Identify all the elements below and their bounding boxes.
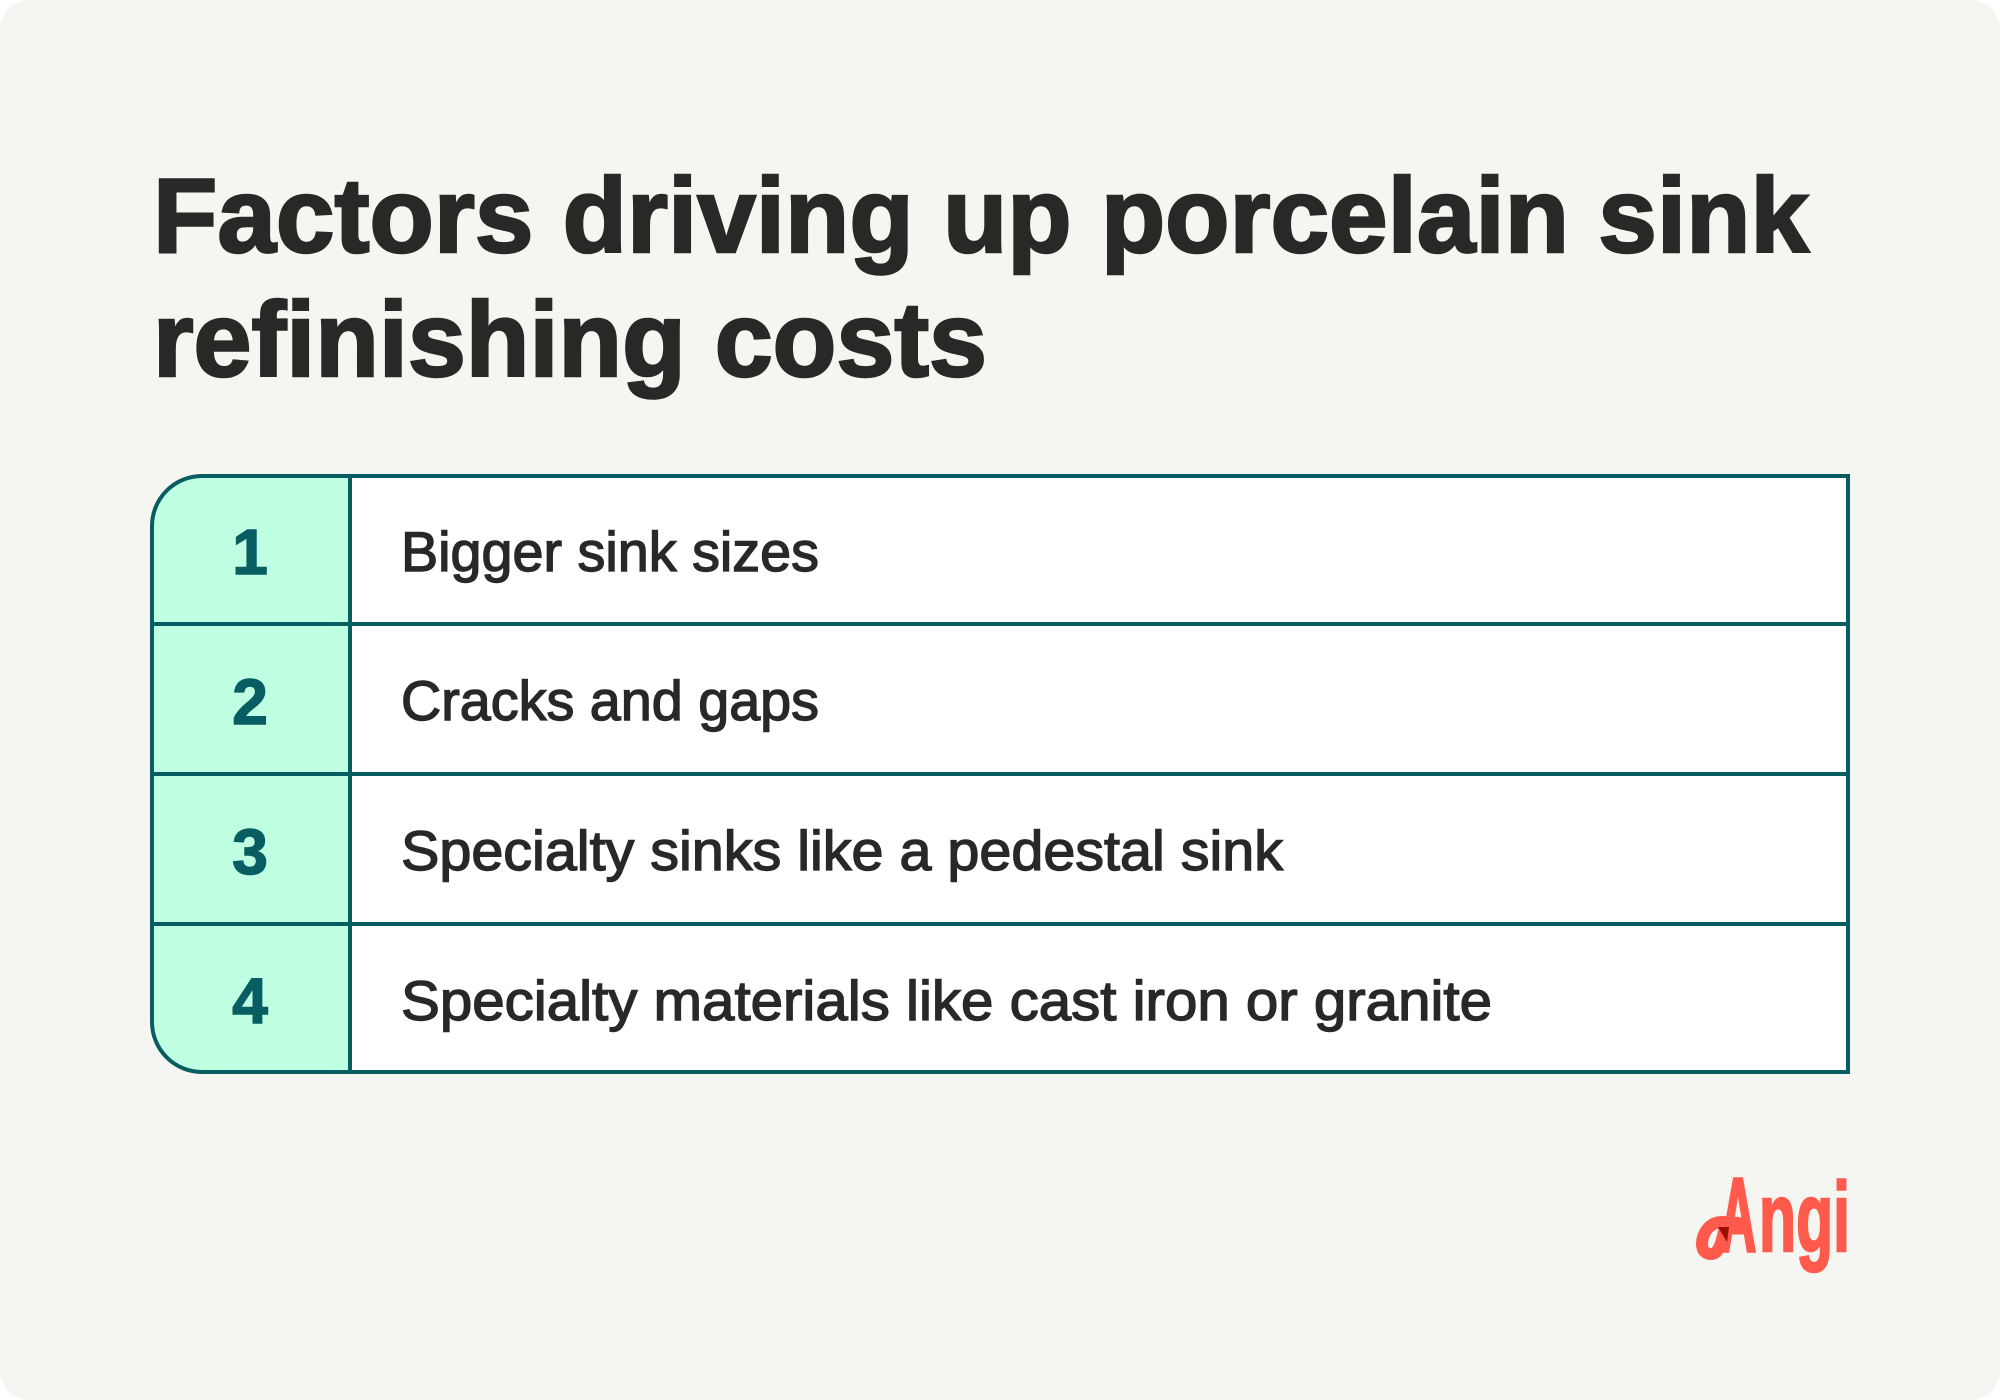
row 2: Cracks and gaps: [401, 669, 819, 732]
row 1: 1: [232, 516, 268, 588]
title: refinishing costs: [153, 281, 987, 399]
row 1: [232, 516, 819, 588]
title: [153, 157, 1810, 399]
title: Factors driving up porcelain sink: [153, 157, 1810, 275]
text column fill: [350, 476, 1848, 1072]
row 2: [232, 666, 819, 738]
logo: Angi: A: [1720, 1158, 1756, 1274]
logo: Angi: [1702, 1158, 1850, 1274]
logo letters ngi: ngi: [1759, 1162, 1850, 1272]
number column fill: [152, 476, 350, 1072]
row 3: 3: [232, 816, 268, 888]
table: [152, 476, 1848, 1072]
row 4: Specialty materials like cast iron or granite: [401, 969, 1492, 1032]
row 4: 4: [232, 965, 268, 1037]
logo loop shadow: [1718, 1227, 1729, 1242]
row 2: 2: [232, 666, 268, 738]
row 1: Bigger sink sizes: [401, 520, 819, 583]
row 3: Specialty sinks like a pedestal sink: [401, 819, 1284, 882]
table grid lines: [152, 476, 1848, 1072]
logo loop: [1702, 1222, 1743, 1254]
